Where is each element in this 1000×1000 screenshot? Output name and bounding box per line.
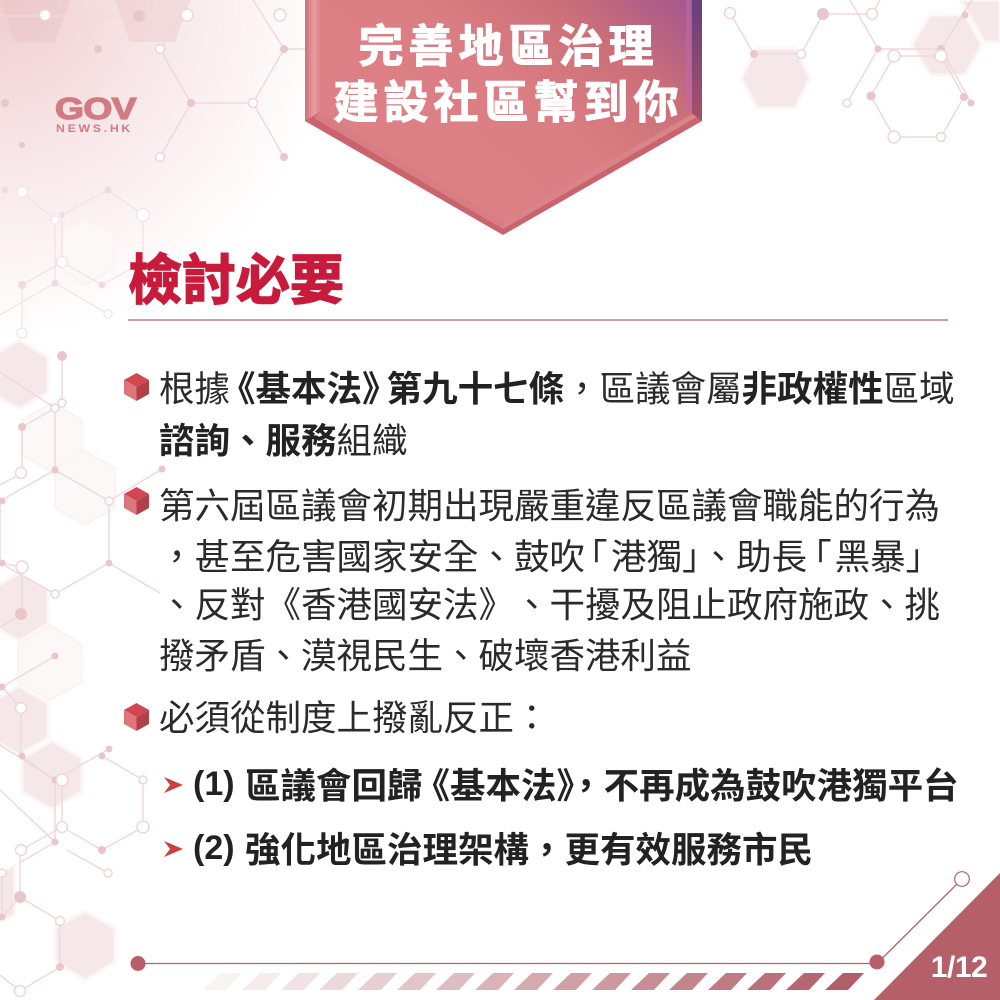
text: point 1 line 2: 諮詢、服務組織 <box>159 413 408 464</box>
section heading: 檢討必要 <box>128 236 344 315</box>
text: point 2 line 3: 、反對《香港國安法》、干擾及阻止政府施政、挑 <box>159 577 940 628</box>
footer striped bar <box>204 973 864 990</box>
icon: arrow 1 <box>164 777 183 793</box>
background: pink corner glow <box>0 0 400 400</box>
page number corner <box>874 873 1000 1000</box>
text: point 3: 必須從制度上撥亂反正： <box>159 690 550 741</box>
text: point 1 line 1: 根據《基本法》第九十七條，區議會屬非政權性區域 <box>159 361 955 412</box>
text: point 2 line 4: 撥矛盾、漠視民生、破壞香港利益 <box>159 628 692 679</box>
title line 2: 建設社區幫到你 <box>333 66 684 131</box>
title banner <box>305 0 702 235</box>
logo: GOV news.hk: GOV <box>55 91 136 126</box>
icon: cube bullet 3 <box>124 703 149 731</box>
title line 1: 完善地區治理 <box>358 10 658 75</box>
heading divider <box>128 319 948 321</box>
page number: 1/12 <box>931 951 987 984</box>
text: point 2 line 2: ，甚至危害國家安全、鼓吹「港獨」、助長「黑暴」 <box>159 529 941 580</box>
logo: GOV news.hk: NEWS.HK <box>56 123 133 135</box>
sub-point 2: (2) <box>193 829 235 867</box>
icon: cube bullet 2 <box>124 487 149 515</box>
icon: arrow 2 <box>164 841 183 857</box>
icon: cube bullet 1 <box>124 373 149 401</box>
text: point 2 line 1: 第六屆區議會初期出現嚴重違反區議會職能的行為 <box>159 478 940 529</box>
footer timeline with nodes <box>130 871 970 971</box>
sub-point 1: 區議會回歸《基本法》，不再成為鼓吹港獨平台 <box>245 758 959 809</box>
sub-point 1: (1) <box>193 765 235 803</box>
sub-point 2: 強化地區治理架構，更有效服務市民 <box>245 822 813 873</box>
